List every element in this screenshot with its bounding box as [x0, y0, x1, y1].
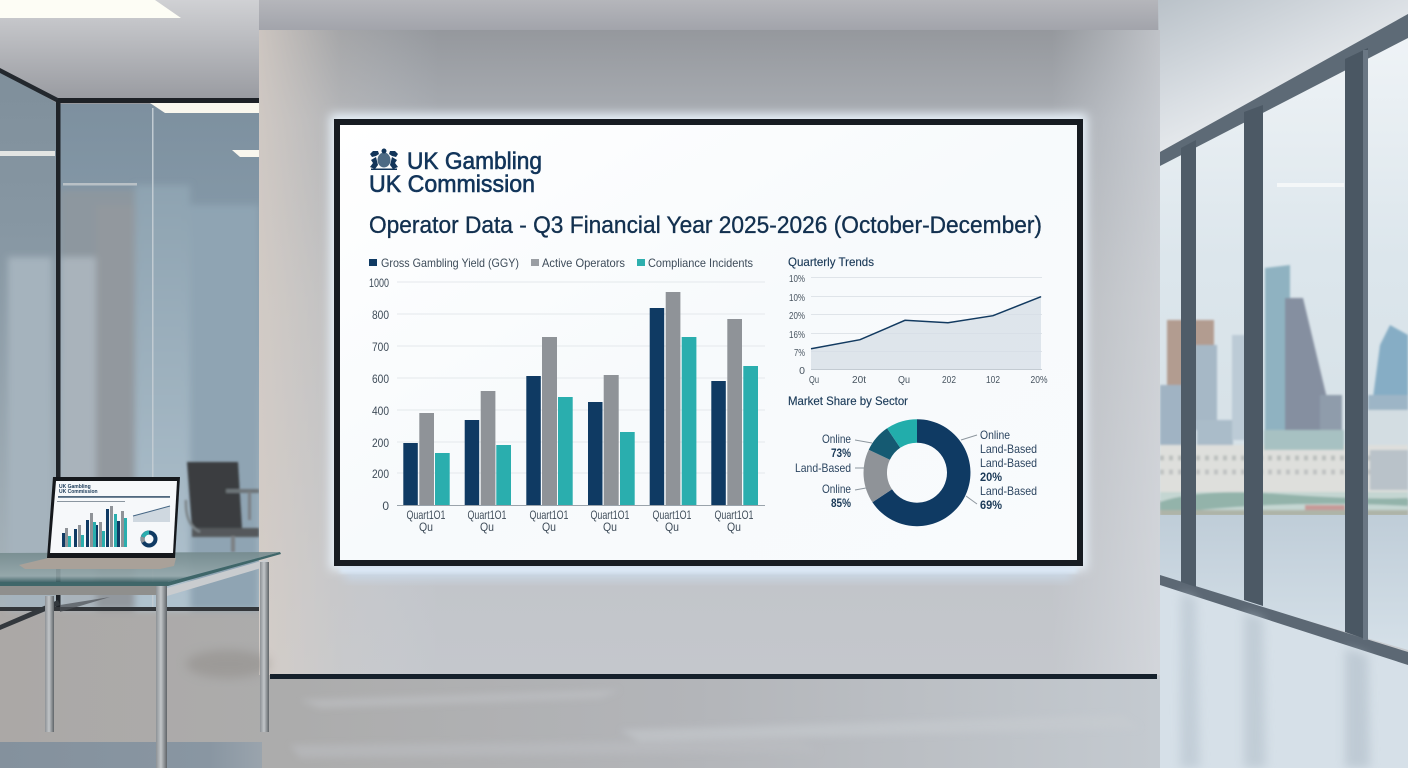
display bezel [334, 119, 1083, 566]
laptop mini dashboard [57, 484, 170, 547]
donut labels right: 69% [980, 498, 1002, 512]
area line chart: 10% [789, 273, 805, 285]
laptop mini dashboard: UK Gambling [59, 484, 91, 490]
x axis labels: Quart1O1 [530, 508, 569, 522]
window frame with mullions [1160, 14, 1408, 665]
area line chart: 0 [799, 365, 805, 377]
ceiling lights [0, 0, 259, 157]
y axis labels: 400 [372, 404, 389, 418]
laptop base [19, 558, 176, 569]
x axis labels: Qu [727, 520, 741, 534]
y axis labels: 200 [372, 436, 389, 450]
office chair [186, 462, 259, 552]
glass partition [0, 68, 259, 630]
donut labels left: Online [822, 432, 851, 446]
x axis labels: Quart1O1 [590, 508, 630, 522]
donut labels right: 20% [980, 470, 1002, 484]
laptop screen [50, 481, 177, 553]
x axis labels: Qu [419, 520, 433, 534]
wall-mounted display [334, 119, 1083, 566]
screen backlight glow [330, 114, 1087, 580]
laptop lid [47, 477, 180, 558]
y axis labels [369, 276, 389, 513]
area line chart: 16% [789, 329, 805, 341]
y axis labels: 600 [372, 372, 389, 386]
bars: active operators [419, 292, 742, 505]
donut labels left: 85% [831, 496, 851, 510]
donut labels left: Land-Based [795, 461, 851, 475]
heading: market share: Market Share by Sector [788, 394, 908, 408]
x axis labels: Quart1O1 [714, 508, 754, 522]
laptop mini dashboard: UK Commission [59, 489, 98, 495]
title: Operator Data - Q3 Financial Year 2025-2026 (October-December) [369, 212, 1042, 239]
donut leader lines [855, 435, 977, 504]
bars: gross gambling yield [403, 308, 726, 505]
table legs [45, 596, 54, 732]
legend: Compliance Incidents [648, 256, 753, 270]
heading: quarterly trends: Quarterly Trends [788, 255, 874, 269]
floor reflections [1180, 592, 1370, 768]
donut labels right: Land-Based [980, 442, 1037, 456]
y axis labels: 700 [372, 340, 389, 354]
area line chart: 20% [789, 310, 805, 322]
logo wordmark line 1: UK Gambling [407, 148, 542, 175]
legend: Gross Gambling Yield (GGY) [381, 256, 519, 270]
x axis labels: Quart1O1 [468, 508, 507, 522]
icon: royal crest [370, 148, 398, 170]
wall [259, 30, 1160, 679]
x axis labels: Quart1O1 [406, 508, 446, 522]
area line chart: 20% [1030, 374, 1048, 386]
y axis labels: 200 [372, 467, 389, 481]
display surface [340, 125, 1077, 560]
donut labels right [980, 428, 1037, 512]
bars: compliance incidents [435, 337, 758, 505]
x axis labels: Qu [542, 520, 556, 534]
y axis labels: 0 [382, 499, 389, 513]
area line chart: 202 [942, 374, 956, 386]
logo wordmark line 2: UK Commission [369, 171, 535, 198]
donut labels right: Online [980, 428, 1010, 442]
laptop [19, 477, 180, 569]
area line chart [789, 273, 1048, 386]
donut chart [864, 419, 970, 526]
panel: market share by sector [788, 394, 1037, 526]
panel: quarterly trends [788, 255, 1048, 386]
donut labels left: Online [822, 482, 851, 496]
x axis labels: Qu [480, 520, 494, 534]
area line chart: Qu [898, 374, 910, 386]
area line chart: 20t [852, 374, 866, 386]
y axis labels: 1000 [369, 276, 389, 290]
y axis labels: 800 [372, 308, 389, 322]
donut labels left: 73% [831, 446, 851, 460]
floor shadow beside wall [186, 650, 270, 678]
donut labels left [795, 432, 851, 510]
legend: Active Operators [542, 256, 625, 270]
x axis labels: Quart1O1 [652, 508, 692, 522]
donut labels right: Land-Based [980, 456, 1037, 470]
area line chart: 7% [794, 347, 805, 359]
x axis labels: Qu [603, 520, 617, 534]
logo [369, 148, 542, 198]
x axis labels: Qu [665, 520, 679, 534]
window panorama with city skyline [1160, 20, 1408, 655]
area line chart: 10% [789, 292, 805, 304]
area line chart: 102 [986, 374, 1000, 386]
area line chart: Qu [809, 374, 819, 386]
glass table [0, 552, 281, 768]
x axis labels [406, 508, 754, 534]
donut labels right: Land-Based [980, 484, 1037, 498]
bar chart [369, 276, 765, 534]
legend [369, 256, 753, 270]
